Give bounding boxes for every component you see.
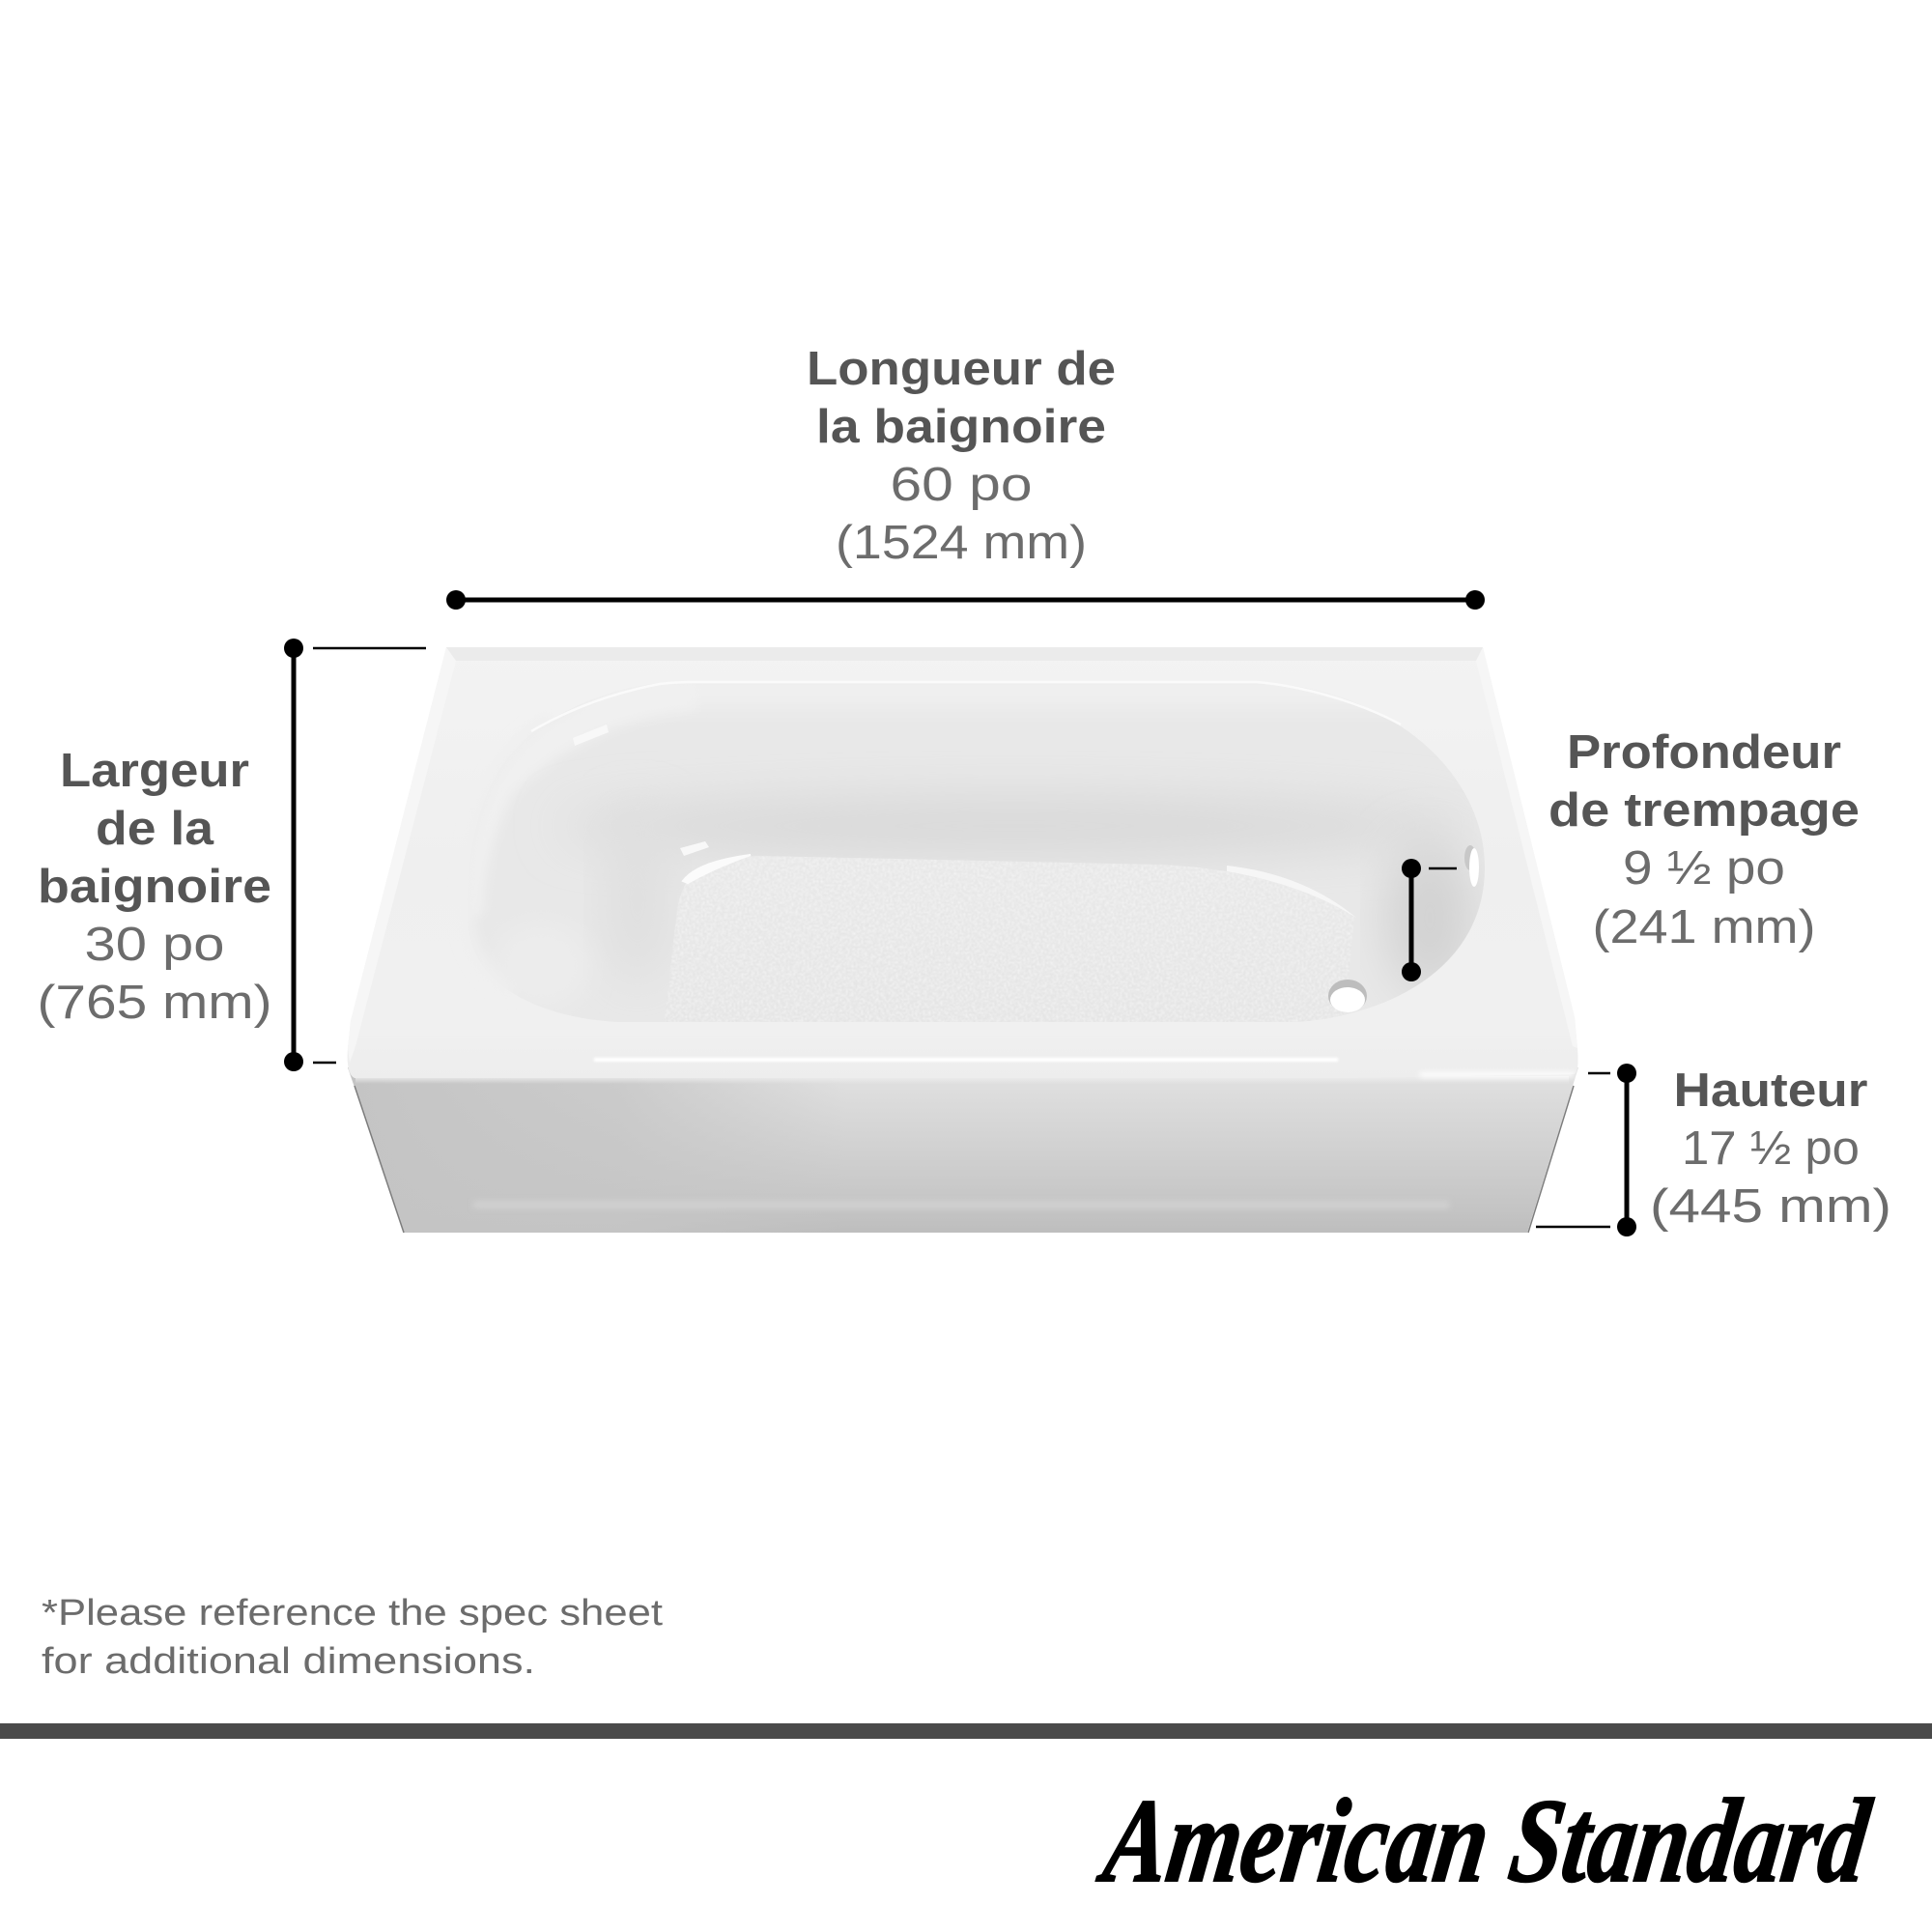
upper left slope bbox=[468, 682, 696, 918]
label: soaking depth: 9 ½ po bbox=[1623, 842, 1785, 895]
label: length: la baignoire bbox=[816, 401, 1106, 453]
apron panel detail bbox=[476, 1203, 1445, 1208]
label: soaking depth: Profondeur bbox=[1567, 726, 1841, 779]
label: width: 30 po bbox=[85, 919, 224, 971]
label: height: (445 mm) bbox=[1650, 1180, 1891, 1233]
label: height: Hauteur bbox=[1673, 1065, 1868, 1117]
side lips bbox=[348, 647, 1577, 1063]
wall shadow band bbox=[674, 798, 1388, 854]
tub deck bbox=[348, 647, 1578, 1078]
label: length bbox=[807, 343, 1116, 569]
back lip bbox=[446, 647, 1483, 661]
floor left highlight bbox=[683, 855, 751, 883]
length dimension line bbox=[446, 590, 1485, 610]
left wall shadow bbox=[604, 811, 671, 985]
label: height: 17 ½ po bbox=[1682, 1122, 1860, 1175]
height dimension line bbox=[1536, 1064, 1636, 1236]
label: soaking depth: de trempage bbox=[1548, 784, 1860, 837]
bowl floor bbox=[664, 856, 1354, 1026]
label: height bbox=[1650, 1065, 1891, 1233]
front rim highlight bbox=[594, 1058, 1338, 1062]
label: soaking depth bbox=[1548, 726, 1860, 953]
rim fade into apron bbox=[355, 1076, 1569, 1084]
infographic canvas bbox=[0, 350, 1932, 1884]
label: length: (1524 mm) bbox=[836, 517, 1087, 569]
lower left light bbox=[493, 923, 589, 1009]
soft left bowl edge bbox=[468, 720, 551, 993]
label: length: Longueur de bbox=[807, 343, 1116, 395]
label: width: (765 mm) bbox=[37, 977, 272, 1029]
label: soaking depth: (241 mm) bbox=[1592, 901, 1816, 953]
footer divider bar bbox=[0, 1723, 1932, 1739]
drain bbox=[1328, 980, 1367, 1012]
label: width: baignoire bbox=[38, 861, 271, 913]
floor right highlight bbox=[1227, 866, 1356, 918]
apron side edges bbox=[355, 1086, 1574, 1233]
width dimension line bbox=[284, 639, 426, 1071]
upper slope light bbox=[464, 676, 1492, 705]
footnote bbox=[42, 1593, 664, 1682]
bowl rim line bbox=[531, 682, 1401, 731]
tub apron bbox=[343, 1067, 1584, 1234]
label: width: Largeur bbox=[60, 745, 249, 797]
label: width bbox=[37, 745, 272, 1029]
soaking depth dimension line bbox=[1402, 859, 1457, 981]
footnote: for additional dimensions. bbox=[42, 1641, 535, 1682]
apron left shade bbox=[348, 1067, 750, 1170]
overflow hole bbox=[1464, 845, 1479, 887]
gloss reflections bbox=[573, 724, 709, 856]
label: width: de la bbox=[96, 803, 214, 855]
label: length: 60 po bbox=[891, 459, 1032, 511]
right end shadow bbox=[1386, 840, 1473, 995]
bathtub illustration bbox=[343, 647, 1584, 1234]
bowl bbox=[487, 714, 1485, 1022]
footnote: *Please reference the spec sheet bbox=[42, 1593, 664, 1634]
bowl basin bbox=[518, 717, 1469, 806]
